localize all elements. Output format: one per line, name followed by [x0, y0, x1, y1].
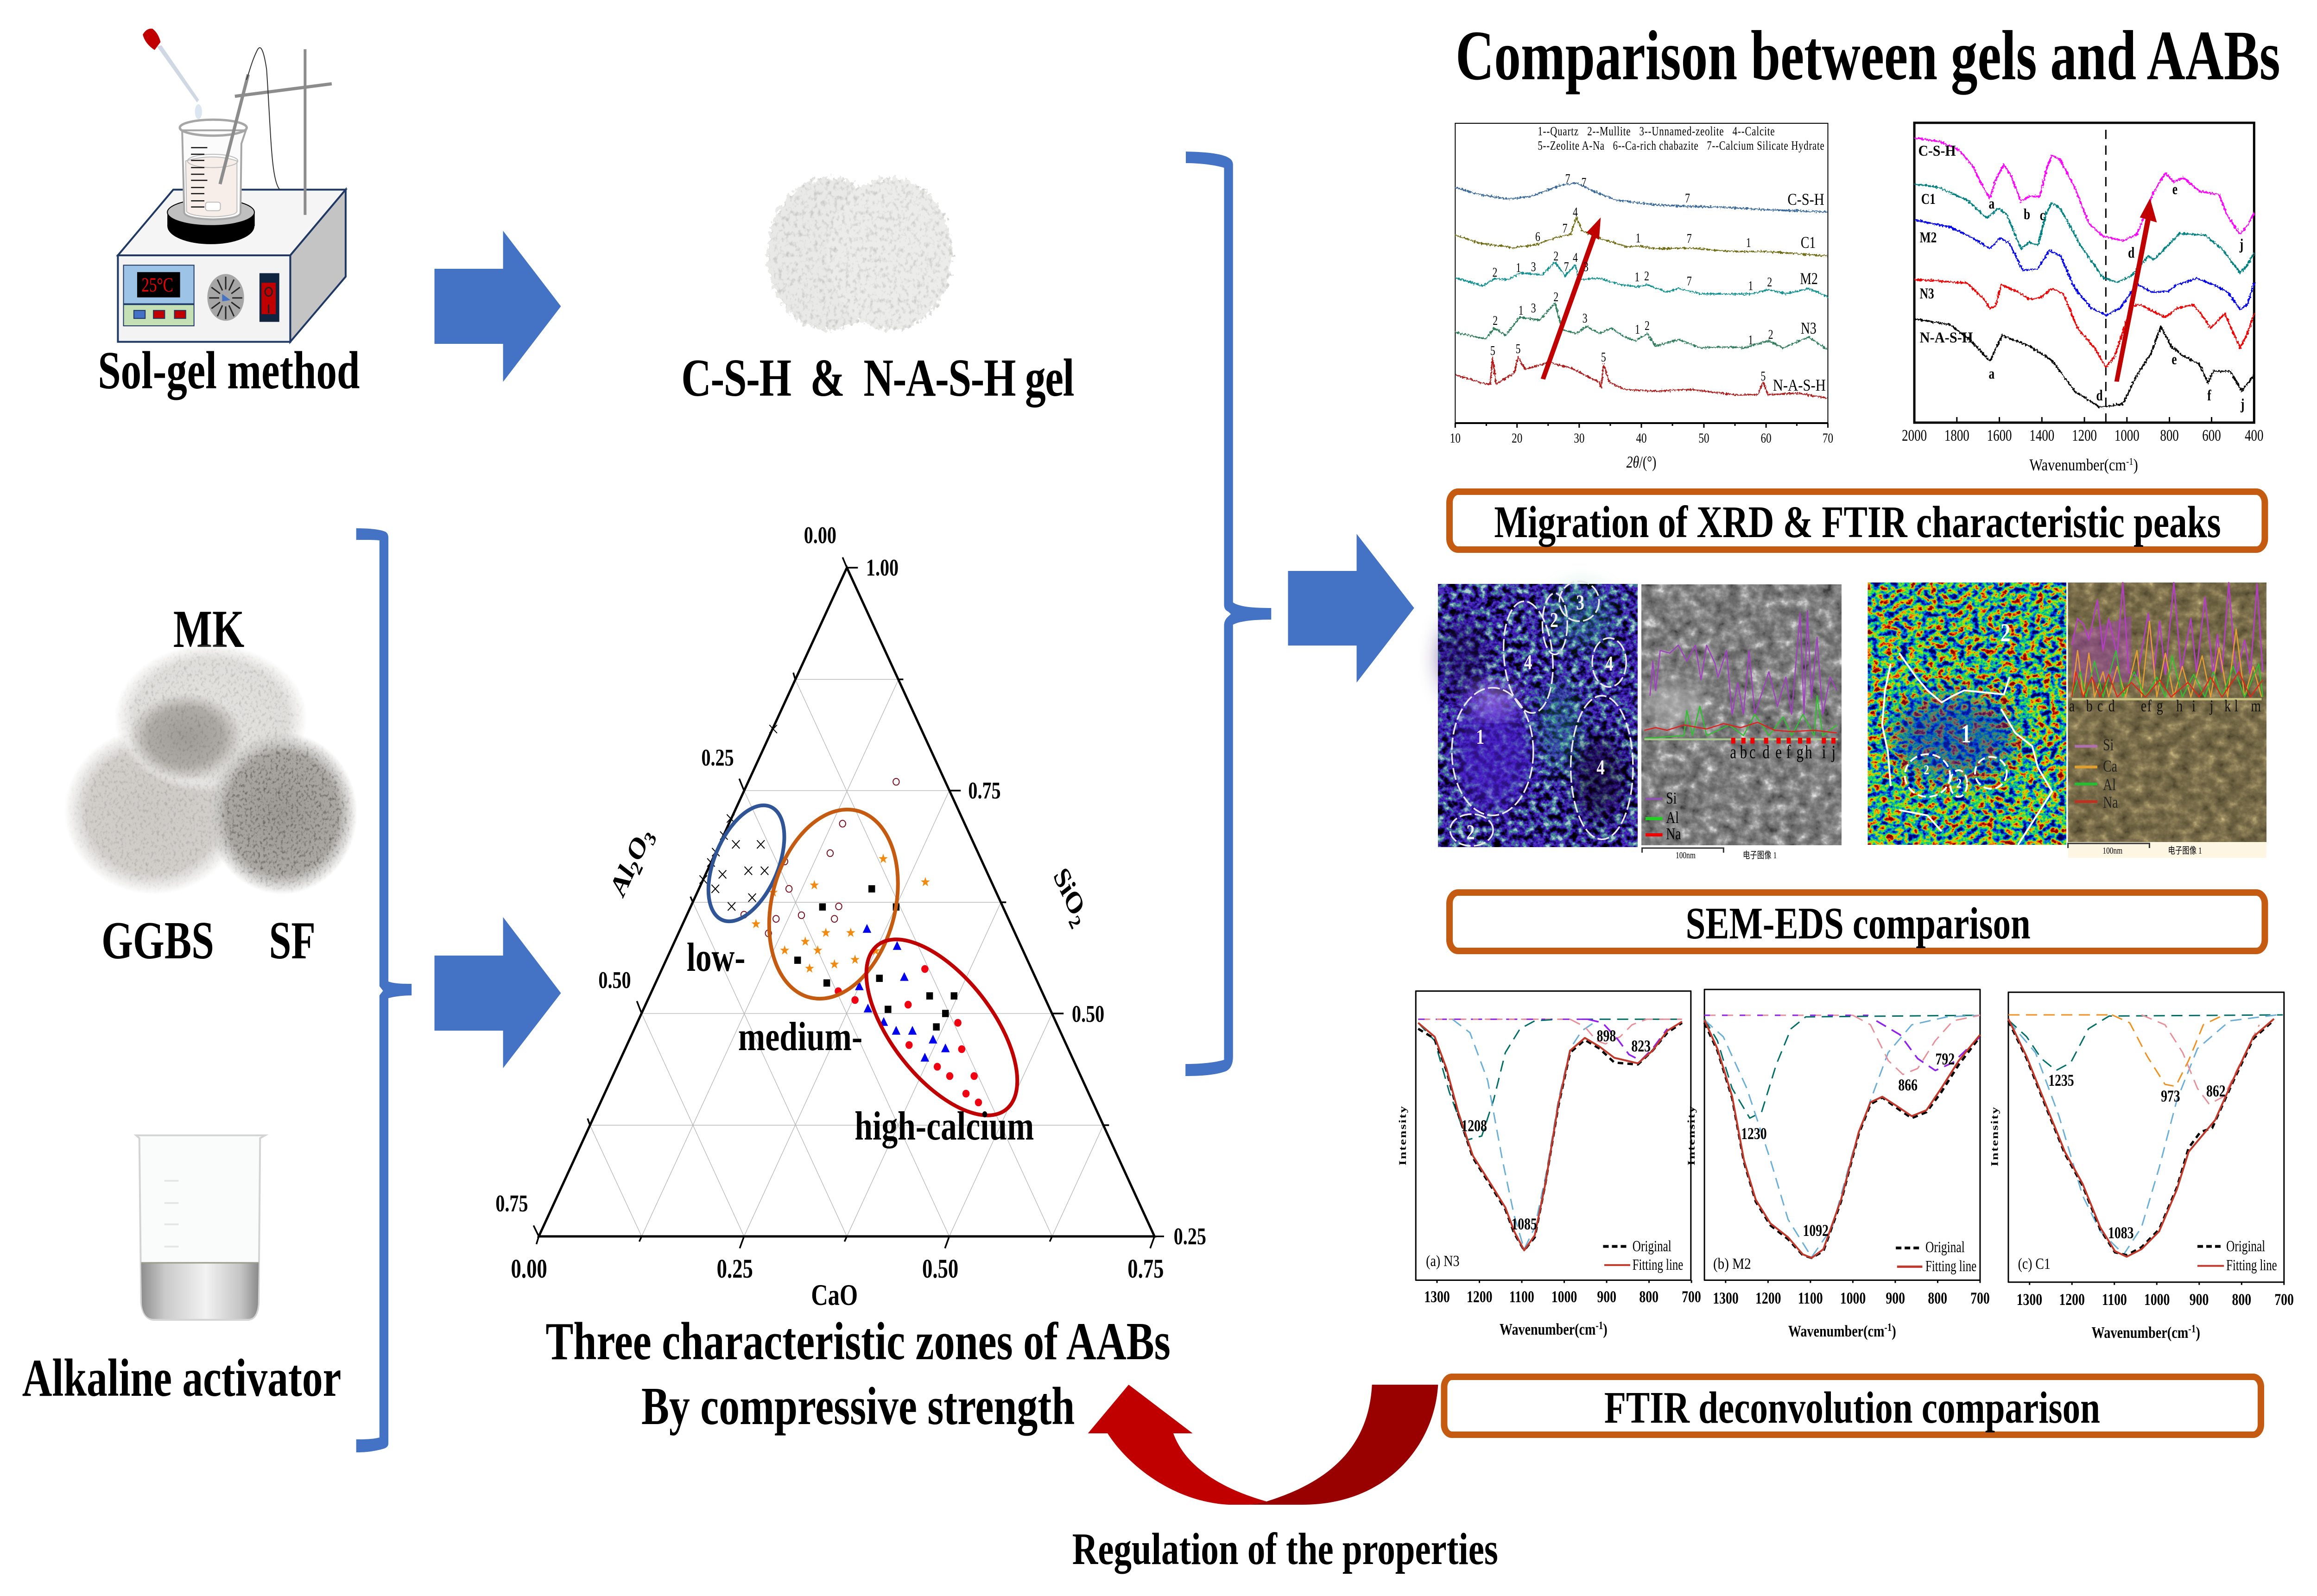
chart: FTIR deconvolution N3: 1208 [1461, 1116, 1487, 1135]
image: SEM-EDS line scan 1 [1641, 584, 1842, 860]
FTIR axis title: ) [2133, 456, 2138, 474]
FTIR series labels: C1 [1921, 191, 1936, 208]
data: red circle markers [835, 965, 982, 1106]
chart: FTIR deconvolution N3: 1085 [1511, 1215, 1537, 1233]
chart: FTIR deconvolution C1: (c) C1 [2018, 1255, 2051, 1273]
heading: alkaline activator: Alkaline activator [22, 1349, 341, 1408]
chart: FTIR deconvolution C1: 1300 [2017, 1290, 2042, 1309]
arrow: to characterization panel [1288, 534, 1414, 683]
label: GGBS: GGBS [101, 911, 214, 970]
chart: FTIR deconvolution M2: 900 [1886, 1289, 1905, 1307]
axis tick labels: 0.50 [1072, 1001, 1104, 1027]
FTIR series labels: N-A-S-H [1920, 329, 1973, 346]
data: triangle markers [855, 924, 950, 1062]
FTIR series labels: f [2207, 387, 2212, 404]
XRD axis: 60 [1761, 430, 1772, 446]
zone: high-calcium ellipse [843, 907, 1040, 1148]
XRD peak labels: 1 [1748, 333, 1753, 348]
XRD peak labels: 7 [1581, 176, 1586, 190]
chart: FTIR deconvolution N3: 1300 [1424, 1287, 1450, 1306]
chart: FTIR deconvolution N3: ) [1603, 1320, 1608, 1338]
image: SEM-EDS line scan 1: f [1786, 741, 1791, 762]
label: medium: medium- [738, 1014, 862, 1059]
XRD peak labels: 3 [1531, 260, 1536, 274]
axis label: CaO: CaO [811, 1278, 858, 1312]
image: SEM map 1: 4 [1596, 755, 1605, 779]
XRD peak labels: 7 [1685, 191, 1690, 206]
FTIR series labels: j [2240, 396, 2244, 413]
FTIR axis: 800 [2160, 426, 2179, 444]
image: SEM-EDS line scan 1: g [1797, 741, 1804, 762]
chart: FTIR deconvolution M2: 700 [1970, 1289, 1990, 1307]
callout: migration of peaks: Migration of XRD & FTIR characteristic peaks [1494, 497, 2221, 547]
FTIR series labels: N3 [1920, 285, 1934, 302]
XRD peak labels [1490, 172, 1773, 384]
XRD peak labels: 7 [1687, 232, 1692, 246]
XRD peak labels: 7 [1564, 260, 1569, 274]
XRD axis: 40 [1636, 430, 1647, 446]
FTIR series labels: d [2128, 245, 2135, 261]
chart: FTIR deconvolution C1: 1083 [2108, 1223, 2133, 1242]
label: low: low- [687, 935, 745, 980]
chart: FTIR deconvolution C1: Intensity [1989, 1107, 2000, 1166]
heading: by compressive strength: By compressive strength [641, 1377, 1075, 1436]
chart: FTIR deconvolution C1: 973 [2161, 1087, 2180, 1105]
image: precursor powders [64, 644, 357, 894]
image: SEM-EDS line scan 1: e [1775, 741, 1782, 762]
XRD peak labels: 2 [1644, 269, 1649, 284]
chart: FTIR deconvolution C1: ) [2196, 1324, 2200, 1342]
FTIR series labels [1918, 143, 2244, 413]
image: SEM-EDS line scan 2: 电子图像 1 [2168, 845, 2202, 855]
image: SEM map 1: 3 [1576, 590, 1584, 614]
XRD peak labels: 1 [1748, 279, 1753, 293]
image: SEM-EDS line scan 1: i [1822, 741, 1826, 762]
chart: FTIR deconvolution N3: Fitting line [1633, 1256, 1683, 1273]
FTIR axis: 400 [2245, 426, 2264, 444]
chart: FTIR deconvolution N3: Wavenumber(cm [1500, 1320, 1592, 1338]
FTIR curves [1914, 138, 2254, 407]
label: SF: SF [269, 911, 316, 970]
image: SEM map 1: 2 [1467, 820, 1475, 844]
chart: FTIR deconvolution M2: 866 [1898, 1076, 1918, 1094]
axis tick labels: 0.50 [598, 967, 631, 994]
chart: FTIR deconvolution M2: 1200 [1755, 1289, 1781, 1307]
axis tick labels: 0.00 [511, 1254, 547, 1284]
callout: SEM-EDS comparison [1450, 893, 2265, 951]
chart: FTIR deconvolution N3 [1397, 991, 1701, 1338]
image: SEM map 1: 2 [1550, 608, 1558, 632]
FTIR series labels: b [2024, 206, 2030, 223]
image: SEM-EDS line scan 2: h [2176, 697, 2183, 715]
image: SEM-EDS line scan 1: Na [1666, 824, 1681, 843]
XRD peak labels: 5 [1761, 369, 1766, 384]
arrow: materials to ternary diagram [435, 917, 561, 1068]
grid lines [590, 679, 1104, 1236]
image: SEM-EDS line scan 1: 100nm [1676, 850, 1696, 860]
image: SEM map 2: 2 [1924, 762, 1929, 778]
image: SEM-EDS line scan 1: a [1730, 741, 1736, 762]
FTIR series labels: e [2172, 181, 2178, 198]
axis tick labels: 0.75 [968, 778, 1001, 804]
image: SEM-EDS line scan 2: Al [2103, 775, 2116, 794]
XRD series labels: C1 [1801, 233, 1816, 252]
FTIR series labels: j [2239, 236, 2243, 253]
FTIR axis: 1800 [1944, 426, 1969, 444]
chart: FTIR deconvolution C1: Fitting line [2226, 1256, 2277, 1274]
chart: FTIR deconvolution C1: Wavenumber(cm [2091, 1324, 2184, 1342]
XRD peak labels: 4 [1573, 251, 1578, 265]
data: star markers [752, 854, 930, 973]
image: SEM-EDS line scan 2: m [2251, 697, 2261, 715]
FTIR axis title: Wavenumber(cm [2029, 456, 2118, 474]
FTIR series labels: M2 [1920, 229, 1937, 246]
image: SEM-EDS line scan 2: e [2141, 697, 2146, 715]
XRD peak labels: 2 [1553, 249, 1558, 264]
image: SEM map 1: 4 [1605, 652, 1613, 675]
image: white gel powder [767, 177, 952, 330]
XRD curves [1455, 183, 1828, 399]
triangle frame and ticks [533, 557, 1164, 1248]
image: SEM map 2 [1868, 583, 2066, 845]
chart: FTIR deconvolution N3: 700 [1682, 1287, 1701, 1306]
XRD legend: 1--Quartz 2--Mullite 3--Unnamed-zeolite 4--Calcite [1538, 125, 1775, 139]
image: SEM map 1 [1438, 581, 1638, 847]
image: SEM-EDS line scan 2 [2068, 583, 2266, 858]
chart: FTIR deconvolution C1: 862 [2206, 1082, 2226, 1100]
XRD peak labels: 7 [1563, 222, 1567, 236]
XRD peak labels: 1 [1516, 261, 1521, 275]
chart: FTIR deconvolution M2: 792 [1936, 1050, 1955, 1068]
image: SEM map 2: 2 [1956, 775, 1962, 791]
chart: FTIR deconvolution N3: -1 [1595, 1319, 1603, 1332]
chart: FTIR deconvolution N3: 1200 [1467, 1287, 1492, 1306]
FTIR axis: 1200 [2072, 426, 2097, 444]
XRD series labels: M2 [1800, 269, 1818, 288]
label: MK: MK [173, 600, 244, 659]
XRD peak labels: 1 [1636, 231, 1640, 246]
FTIR series labels: c [2040, 207, 2045, 224]
bracket: left raw materials [356, 528, 411, 1452]
image: SEM-EDS line scan 2: 100nm [2102, 845, 2122, 855]
chart: FTIR deconvolution C1 [1989, 992, 2294, 1342]
XRD axis: 20 [1512, 430, 1522, 446]
XRD peak labels: 2 [1767, 275, 1772, 290]
data: cross markers [700, 725, 777, 911]
chart: FTIR deconvolution N3: 900 [1597, 1287, 1616, 1306]
XRD peak labels: 4 [1573, 205, 1578, 220]
image: SEM-EDS line scan 2: d [2108, 697, 2115, 715]
axis tick labels: 1.00 [866, 555, 899, 581]
zone: medium-calcium ellipse [743, 779, 924, 1029]
XRD peak labels: 7 [1565, 172, 1570, 186]
chart: XRD patterns [1450, 123, 1833, 471]
XRD peak labels: 7 [1687, 274, 1692, 289]
image: SEM-EDS line scan 1: Al [1666, 808, 1679, 827]
image: SEM-EDS line scan 2: a [2069, 697, 2075, 715]
FTIR series labels: d [2096, 387, 2103, 404]
image: SEM-EDS line scan 2: k [2224, 697, 2231, 715]
axis tick labels: 0.25 [1174, 1223, 1206, 1250]
image: SEM-EDS line scan 1: Si [1666, 789, 1677, 807]
axis tick labels: 0.00 [804, 522, 836, 549]
FTIR migration arrow [2114, 198, 2157, 382]
icon: sol-gel magnetic stirrer apparatus [118, 29, 346, 342]
XRD peak labels: 1 [1635, 323, 1640, 337]
XRD axis [1450, 430, 1833, 471]
bracket: right [1185, 152, 1271, 1076]
image: SEM map 2: 1 [1961, 719, 1971, 748]
FTIR series labels: e [2171, 351, 2177, 368]
axis label: Al2O3: Al [605, 859, 639, 902]
chart: FTIR deconvolution M2: (b) M2 [1713, 1255, 1751, 1273]
label: high-calcium: high-calcium [855, 1103, 1034, 1148]
chart: FTIR deconvolution M2: Wavenumber(cm [1788, 1322, 1880, 1340]
callout: FTIR deconvolution comparison: FTIR deconvolution comparison [1604, 1383, 2100, 1432]
chart: FTIR deconvolution M2: Original [1925, 1238, 1965, 1256]
chart: FTIR deconvolution C1: 1000 [2144, 1290, 2170, 1309]
XRD series labels: C-S-H [1787, 190, 1824, 209]
chart: FTIR deconvolution N3: 1100 [1509, 1287, 1534, 1306]
chart: FTIR deconvolution C1: 1100 [2102, 1290, 2127, 1309]
image: SEM-EDS line scan 2: f [2147, 697, 2152, 715]
FTIR axis: 600 [2202, 426, 2221, 444]
image: SEM-EDS line scan 2: b [2086, 697, 2093, 715]
chart: FTIR deconvolution N3: Original [1633, 1237, 1671, 1255]
chart: FTIR deconvolution M2: 800 [1928, 1289, 1947, 1307]
axis label: Al2O3: O [621, 829, 653, 867]
axis tick labels: 0.25 [717, 1254, 753, 1284]
chart: FTIR deconvolution C1: 1200 [2059, 1290, 2085, 1309]
chart: FTIR deconvolution C1: 1235 [2048, 1071, 2074, 1089]
axis tick labels [495, 522, 1206, 1284]
image: SEM-EDS line scan 2: Na [2103, 793, 2118, 811]
chart: FTIR deconvolution M2: 1300 [1713, 1289, 1739, 1307]
FTIR series labels: a [1988, 196, 1994, 212]
XRD axis: 2θ/(°) [1627, 453, 1656, 471]
XRD series labels: N3 [1801, 319, 1817, 337]
axis label: SiO2: 2 [1065, 912, 1085, 933]
axis tick labels: 0.25 [701, 745, 734, 771]
chart: FTIR deconvolution N3: 1000 [1551, 1287, 1577, 1306]
XRD axis: 10 [1450, 430, 1461, 446]
XRD migration arrow [1541, 217, 1601, 380]
image: SEM map 1: 4 [1524, 650, 1532, 674]
chart: FTIR deconvolution M2: 1092 [1803, 1221, 1829, 1240]
XRD peak labels: 3 [1531, 301, 1536, 316]
chart: FTIR deconvolution N3: (a) N3 [1426, 1252, 1460, 1270]
chart: FTIR deconvolution C1: 900 [2190, 1290, 2209, 1309]
FTIR axis: 1400 [2029, 426, 2054, 444]
XRD series labels: N-A-S-H [1773, 376, 1826, 394]
chart: FTIR deconvolution M2: -1 [1884, 1321, 1892, 1334]
chart: FTIR deconvolution C1: -1 [2188, 1323, 2196, 1335]
XRD peak labels: 6 [1535, 230, 1540, 244]
image: SEM-EDS line scan 2: Si [2103, 735, 2114, 754]
XRD peak labels: 3 [1583, 311, 1588, 326]
chart: ternary diagram [495, 522, 1206, 1312]
XRD peak labels: 2 [1645, 319, 1650, 333]
title: comparison between gels and AABs: Comparison between gels and AABs [1456, 16, 2280, 95]
chart: FTIR deconvolution N3: 800 [1639, 1287, 1659, 1306]
FTIR axis: 2000 [1902, 426, 1927, 444]
chart: FTIR deconvolution M2: Intensity [1685, 1106, 1697, 1165]
FTIR axis: 1000 [2114, 426, 2140, 444]
zone: low-calcium ellipse [693, 787, 800, 939]
chart: FTIR deconvolution M2: 1100 [1798, 1289, 1823, 1307]
image: SEM-EDS line scan 2: l [2235, 697, 2238, 715]
XRD peak labels: 5 [1516, 342, 1520, 356]
label: display temperature: 25°C [141, 274, 173, 296]
image: SEM-EDS line scan 1: b [1740, 741, 1747, 762]
heading: three characteristic zones: Three characteristic zones of AABs [545, 1312, 1171, 1371]
image: SEM map 1: 1 [1476, 725, 1484, 748]
axis tick labels: 0.50 [922, 1254, 958, 1284]
XRD peak labels: 1 [1519, 304, 1524, 318]
XRD axis: 30 [1574, 430, 1584, 446]
axis label: Al2O3: 3 [640, 828, 660, 849]
image: SEM-EDS line scan 2: c [2097, 697, 2103, 715]
FTIR series labels: a [1988, 366, 1994, 382]
heading: regulation of the properties: Regulation of the properties [1072, 1524, 1498, 1574]
XRD peak labels: 2 [1493, 266, 1497, 280]
data: square markers [794, 885, 957, 1031]
XRD legend: 5--Zeolite A-Na 6--Ca-rich chabazite 7--Calcium Silicate Hydrate [1538, 139, 1824, 153]
arrow: regulation curved arrow [1088, 1385, 1438, 1505]
XRD axis: 70 [1823, 430, 1833, 446]
chart: FTIR deconvolution M2: Fitting line [1925, 1257, 1976, 1275]
axis label: Al2O3: 2 [627, 857, 646, 879]
image: SEM-EDS line scan 2: j [2209, 697, 2213, 715]
chart: FTIR deconvolution N3: 823 [1631, 1037, 1651, 1055]
heading: sol-gel method: Sol-gel method [98, 341, 360, 400]
XRD peak labels: 2 [1553, 290, 1558, 304]
XRD peak labels: 3 [1583, 260, 1589, 274]
chart: FTIR deconvolution C1: Original [2226, 1237, 2265, 1255]
image: SEM-EDS line scan 1: c [1749, 741, 1756, 762]
chart: FTIR deconvolution N3: 898 [1597, 1026, 1616, 1045]
chart: FTIR deconvolution M2 [1685, 989, 1990, 1340]
XRD series labels [1773, 190, 1826, 394]
image: SEM map 2: 2 [2000, 618, 2010, 647]
image: SEM-EDS line scan 2: g [2157, 697, 2163, 715]
arrow: sol-gel to gel [435, 231, 561, 382]
image: SEM-EDS line scan 1: h [1805, 741, 1812, 762]
image: SEM-EDS line scan 2: i [2192, 697, 2196, 715]
chart: FTIR deconvolution M2: 1230 [1741, 1124, 1767, 1143]
XRD peak labels: 5 [1490, 344, 1495, 358]
XRD peak labels: 5 [1601, 350, 1606, 365]
axis label: SiO2: SiO [1048, 861, 1090, 921]
FTIR axis: 1600 [1987, 426, 2012, 444]
XRD axis: 50 [1698, 430, 1709, 446]
image: SEM-EDS line scan 1: j [1831, 741, 1836, 762]
FTIR series labels: C-S-H [1918, 143, 1956, 159]
chart: FTIR deconvolution M2: 1000 [1840, 1289, 1866, 1307]
callout: SEM-EDS comparison: SEM-EDS comparison [1686, 899, 2031, 948]
XRD peak labels: 1 [1746, 236, 1751, 250]
image: SEM-EDS line scan 2: Ca [2103, 757, 2117, 775]
callout: FTIR deconvolution comparison [1444, 1377, 2261, 1435]
XRD legend [1538, 125, 1824, 153]
axis tick labels: 0.75 [495, 1191, 528, 1217]
icon: beaker of alkaline activator [136, 1135, 265, 1320]
chart: FTIR deconvolution C1: 800 [2232, 1290, 2251, 1309]
axis tick labels: 0.75 [1127, 1254, 1164, 1284]
chart: FTIR deconvolution C1: 700 [2274, 1290, 2294, 1309]
XRD peak labels: 1 [1634, 270, 1640, 285]
chart: FTIR spectra [1902, 123, 2264, 474]
chart: FTIR deconvolution M2: ) [1892, 1322, 1896, 1340]
image: SEM-EDS line scan 1: d [1762, 741, 1770, 762]
chart: FTIR deconvolution N3: Intensity [1397, 1106, 1408, 1165]
heading: gel label: C-S-H & N-A-S-H gel [681, 348, 1074, 408]
data: open circle markers [741, 779, 899, 937]
XRD peak labels: 2 [1493, 314, 1498, 328]
XRD peak labels: 2 [1768, 328, 1773, 342]
FTIR axis title: -1 [2126, 456, 2133, 468]
FTIR axis [1902, 426, 2264, 444]
image: SEM-EDS line scan 1: 电子图像 1 [1743, 850, 1777, 860]
